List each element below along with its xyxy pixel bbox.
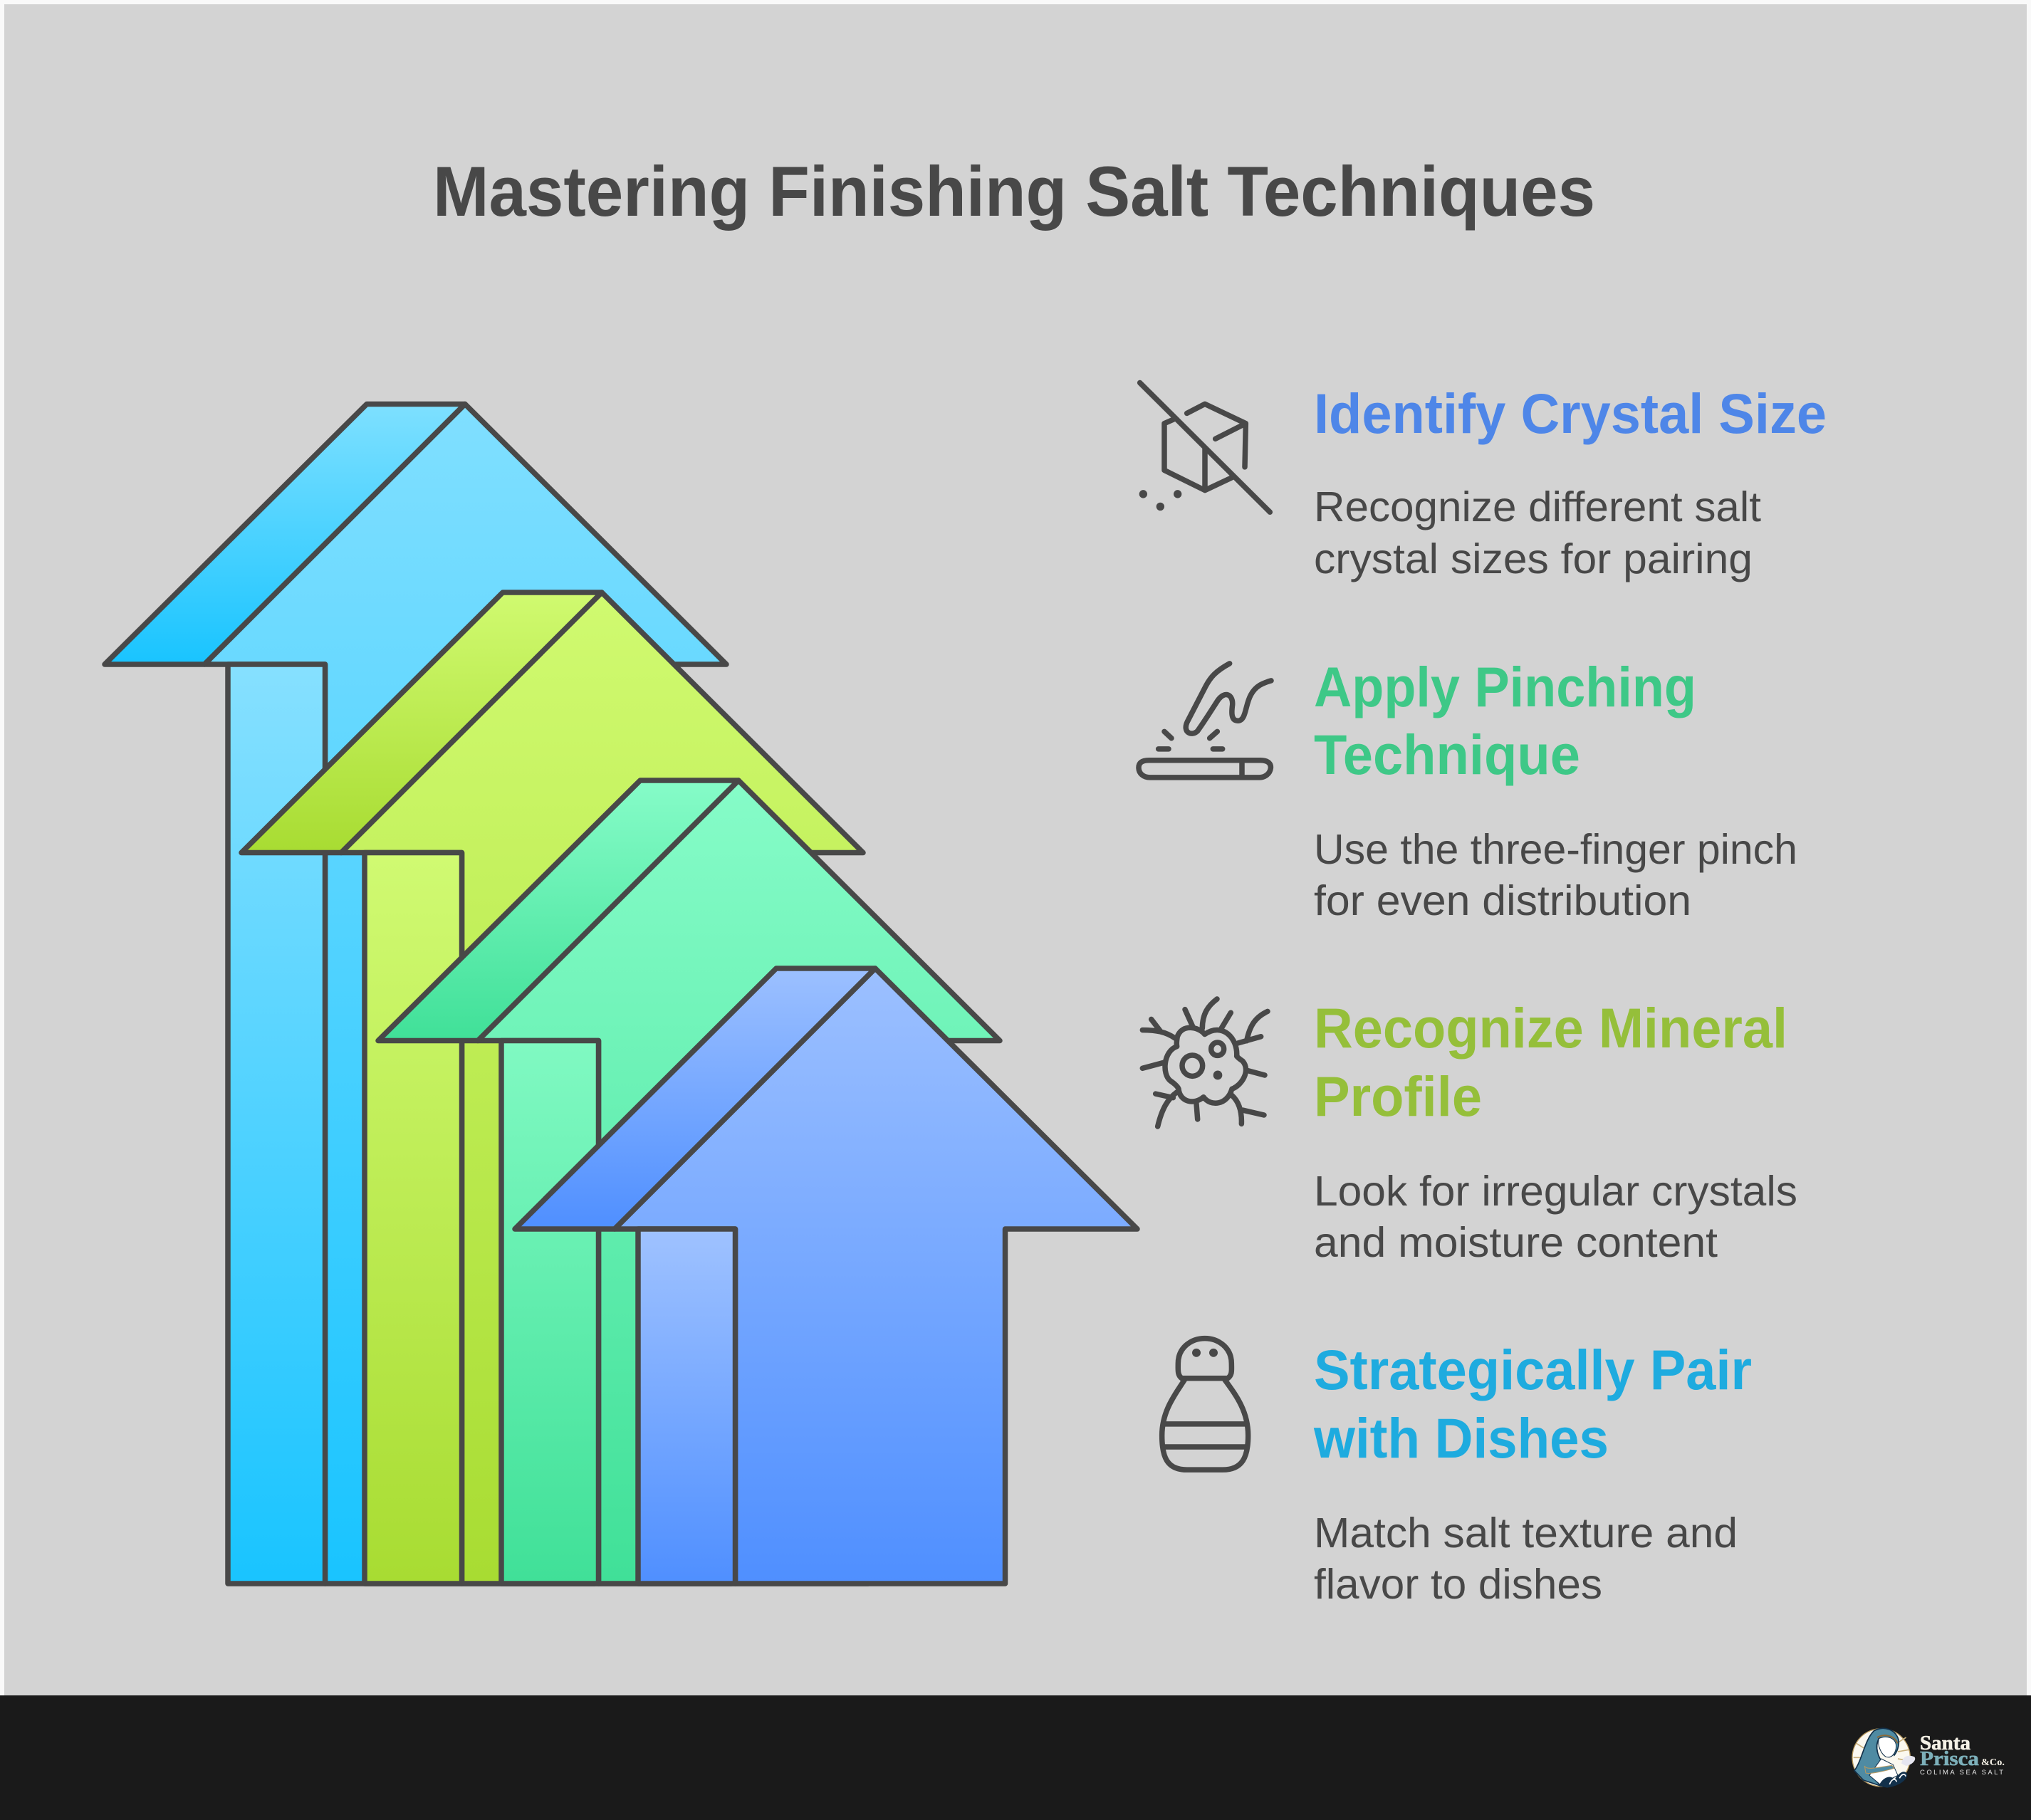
arrow 1: cyan xyxy=(105,404,726,1584)
step 2 text: Use the three-finger pinch xyxy=(1314,826,1797,873)
step 2 text: Apply Pinching xyxy=(1314,655,1696,718)
icon: crossed-out salt crystal xyxy=(1139,383,1270,512)
step 3 text: Profile xyxy=(1314,1065,1482,1128)
title: Mastering Finishing Salt Techniques xyxy=(433,152,1595,231)
step 2 text: Technique xyxy=(1314,723,1580,786)
black footer bar xyxy=(0,1695,2031,1820)
step 2 text xyxy=(1314,655,1797,924)
step 4 text: flavor to dishes xyxy=(1314,1561,1602,1608)
logo wordmark: COLIMA SEA SALT xyxy=(1920,1769,2003,1777)
step 4 text: Strategically Pair xyxy=(1314,1338,1752,1401)
step 1 text: crystal sizes for pairing xyxy=(1314,535,1753,582)
stacked arrows chart xyxy=(105,404,1137,1584)
step 4 text: with Dishes xyxy=(1313,1406,1609,1470)
step 4 text xyxy=(1313,1338,1752,1608)
step 1 text: Recognize different salt xyxy=(1314,483,1761,530)
step 4 text: Match salt texture and xyxy=(1314,1510,1738,1557)
step 1 text: Identify Crystal Size xyxy=(1314,382,1827,445)
logo wordmark: Santa xyxy=(1920,1732,1970,1754)
step 3 text: and moisture content xyxy=(1314,1219,1718,1266)
step 3 text: Look for irregular crystals xyxy=(1314,1168,1797,1215)
step 3 text xyxy=(1314,996,1797,1266)
arrow 2: lime xyxy=(241,592,863,1584)
step 3 text: Recognize Mineral xyxy=(1314,996,1787,1060)
icon: pinching fingers over tray xyxy=(1139,664,1271,778)
icon: mineral crystal cluster xyxy=(1142,999,1268,1126)
icon: salt shaker xyxy=(1162,1339,1248,1470)
step 2 text: for even distribution xyxy=(1314,877,1691,924)
logo emblem xyxy=(1852,1728,1915,1788)
arrow 3: mint xyxy=(378,780,1000,1584)
logo wordmark: Prisca xyxy=(1920,1747,1980,1770)
logo wordmark xyxy=(1920,1732,2005,1777)
brand logo xyxy=(1852,1728,2005,1788)
arrow 4: blue xyxy=(515,968,1137,1584)
step 1 text xyxy=(1314,382,1827,582)
logo wordmark: &Co. xyxy=(1981,1757,2005,1768)
